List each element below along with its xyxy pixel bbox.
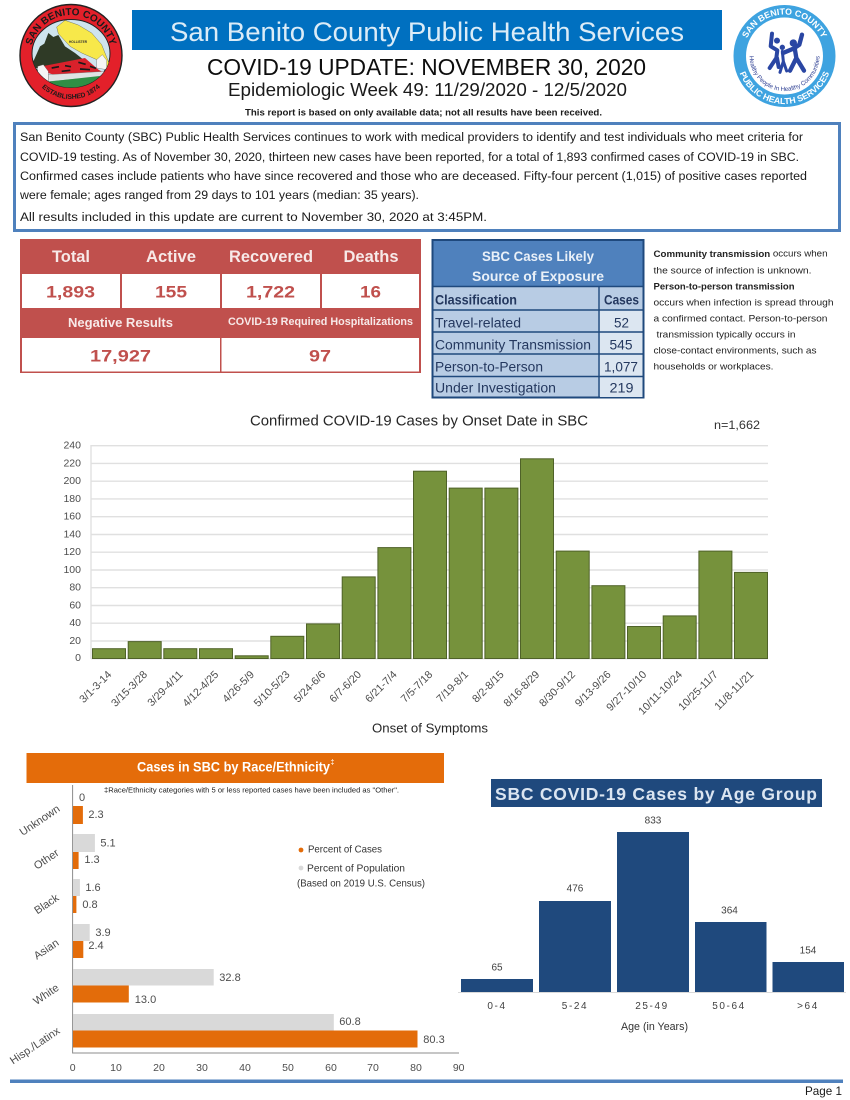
sample size: n=1,662: [714, 420, 760, 432]
title banner: San Benito County Public Health Services: [170, 17, 684, 47]
chart banner: [26, 753, 444, 783]
value labels: 65: [491, 962, 503, 974]
panel: source of exposure table: Under Investigation: [435, 380, 556, 396]
value labels: 2.4: [88, 940, 104, 952]
x axis labels: 0: [70, 1062, 76, 1074]
x axis labels: 7/19-8/1: [434, 669, 471, 705]
age labels: 5-24: [562, 1001, 588, 1012]
x axis labels: 10/25-11/7: [676, 669, 721, 713]
text block: transmission definitions: [654, 248, 834, 372]
x axis labels: 50: [282, 1062, 294, 1074]
logo: San Benito County seal: [19, 4, 123, 108]
logo ring text bottom: PUBLIC HEALTH SERVICES: [740, 71, 829, 104]
category labels: Unknown: [18, 803, 62, 839]
y axis labels: 220: [63, 457, 81, 469]
value labels: 3.9: [95, 927, 111, 939]
x axis labels: 4/12-4/25: [180, 669, 221, 710]
value labels: 80.3: [423, 1034, 445, 1046]
legend: [297, 844, 425, 890]
axes: [73, 785, 459, 1053]
y axis labels: 0: [75, 652, 81, 664]
x axis labels: 9/13-9/26: [573, 669, 614, 710]
panel: case totals table: 16: [360, 282, 381, 302]
panel: case totals table: 1,893: [46, 282, 95, 302]
x axis labels: 70: [367, 1062, 379, 1074]
y axis labels: 140: [63, 528, 81, 540]
text block: transmission definitions: Community transmission occurs when: [654, 248, 828, 258]
y axis labels: 120: [63, 546, 81, 558]
chart: confirmed cases by onset date: [63, 412, 768, 736]
x axis labels: 8/30-9/12: [537, 669, 578, 710]
chart: cases by age group: [458, 779, 846, 1033]
panel: source of exposure table: Classification: [435, 292, 517, 308]
category labels: [8, 803, 63, 1067]
x axis labels: 60: [325, 1062, 337, 1074]
x axis labels: 5/10-5/23: [252, 669, 293, 710]
panel: situation summary: COVID-19 testing. As of November 30, 2020, thirteen new cases have been reported, for a total of 1,893 confirmed cases of COVID-19 in SBC.: [20, 150, 799, 164]
panel: situation summary: All results included in this update are current to November 30, 2020 at 3:45PM.: [20, 210, 487, 224]
case bars: [73, 806, 418, 1048]
chart banner: SBC COVID-19 Cases by Age Group: [495, 784, 817, 804]
bars: [461, 832, 844, 992]
category labels: Other: [32, 847, 62, 872]
panel: case totals table: Total: [52, 248, 90, 266]
chart banner: [491, 779, 822, 807]
page number: Page 1: [805, 1084, 842, 1098]
value labels: 5.1: [100, 838, 116, 850]
text block: transmission definitions: occurs when infection is spread through: [654, 296, 834, 308]
y axis labels: [63, 440, 81, 664]
panel: case totals table: Recovered: [229, 248, 313, 266]
value labels: 833: [645, 816, 662, 826]
x axis title: Onset of Symptoms: [372, 720, 489, 736]
panel: case totals table: 1,722: [246, 282, 295, 302]
value labels: [491, 816, 817, 974]
age labels: 50-64: [712, 1001, 746, 1012]
text block: transmission definitions: Person-to-person transmission: [654, 280, 795, 292]
panel: case totals table: Negative Results: [68, 316, 173, 330]
title banner: [132, 10, 722, 50]
panel: case totals table: [20, 239, 421, 373]
x axis labels: 5/24-6/6: [292, 669, 328, 705]
chart: cases by race and ethnicity: [8, 753, 465, 1074]
value labels: 0.8: [82, 899, 98, 911]
panel: source of exposure table: Cases: [604, 292, 639, 308]
x axis labels: 9/27-10/10: [604, 669, 649, 714]
value labels: 0: [79, 792, 85, 804]
legend: Percent of Population: [307, 864, 405, 874]
panel: case totals table: Deaths: [344, 248, 398, 266]
category labels: Asian: [32, 937, 61, 962]
category labels: Black: [32, 892, 62, 917]
value labels: 13.0: [135, 994, 156, 1006]
panel: source of exposure table: 219: [610, 380, 634, 396]
logo: Public Health Services: [734, 5, 836, 107]
report disclaimer: This report is based on only available data; not all results have been received.: [245, 108, 602, 118]
value labels: 476: [567, 884, 584, 894]
chart banner: ‡: [330, 760, 334, 766]
logo: San Benito County seal: ESTABLISHED 1874: [42, 84, 100, 99]
x axis labels: [77, 669, 756, 717]
panel: situation summary: San Benito County (SBC) Public Health Services continues to work with medical providers to identify and test individuals who meet criteria for: [20, 130, 803, 144]
value labels: [79, 792, 445, 1046]
y axis labels: 200: [63, 475, 81, 487]
y axis labels: 80: [69, 582, 81, 594]
text block: transmission definitions: the source of infection is unknown.: [654, 264, 812, 276]
y axis labels: 180: [63, 493, 81, 505]
y axis labels: 60: [69, 599, 81, 611]
x axis labels: 3/15-3/28: [109, 669, 150, 710]
icon: three figures: [770, 34, 804, 72]
panel: case totals table: 97: [309, 346, 331, 366]
panel: case totals table: 17,927: [90, 346, 151, 366]
seal ring text: SAN BENITO COUNTY: [26, 8, 117, 44]
panel: source of exposure table: Travel-related: [435, 316, 521, 330]
x axis labels: 4/26-5/9: [220, 669, 257, 705]
panel: source of exposure table: SBC Cases Likely: [482, 248, 594, 264]
panel: case totals table: Active: [146, 248, 196, 266]
x axis labels: 10: [110, 1062, 122, 1074]
panel: source of exposure table: 1,077: [604, 360, 638, 374]
chart banner: Cases in SBC by Race/Ethnicity: [137, 760, 330, 774]
text block: transmission definitions: transmission typically occurs in: [656, 328, 796, 340]
panel: case totals table: 155: [155, 282, 187, 302]
value labels: 1.6: [85, 882, 101, 894]
x axis labels: 8/16-8/29: [501, 669, 542, 710]
y axis labels: 160: [63, 510, 81, 522]
x axis labels: 6/7-6/20: [327, 669, 364, 705]
panel: source of exposure table: [432, 240, 644, 398]
footnote: ‡Race/Ethnicity categories with 5 or less reported cases have been included as "Other".: [104, 786, 399, 794]
x axis labels: 30: [196, 1062, 208, 1074]
y axis labels: 240: [63, 440, 81, 452]
age labels: >64: [797, 1001, 819, 1012]
gridlines: [91, 445, 768, 659]
x axis labels: 80: [410, 1062, 422, 1074]
value labels: 2.3: [88, 809, 104, 821]
category labels: White: [31, 982, 61, 1008]
chart title: Confirmed COVID-19 Cases by Onset Date in SBC: [250, 412, 588, 430]
footer rule: [10, 1080, 843, 1083]
x axis labels: 11/8-11/21: [712, 669, 756, 713]
x axis labels: 7/5-7/18: [399, 669, 435, 705]
panel: situation summary: Confirmed cases include patients who have since recovered and those who are deceased. Fifty-four percent (1,015) of positive cases reported: [20, 169, 807, 183]
baseline: [458, 992, 846, 994]
panel: source of exposure table: Person-to-Person: [435, 360, 543, 374]
text block: transmission definitions: households or workplaces.: [654, 360, 774, 372]
x axis labels: 90: [453, 1062, 465, 1074]
y axis labels: 100: [63, 564, 81, 576]
y axis labels: 20: [69, 635, 81, 647]
value labels: 1.3: [84, 854, 100, 866]
text block: transmission definitions: a confirmed contact. Person-to-person: [654, 312, 828, 324]
x axis labels: 6/21-7/4: [363, 669, 400, 705]
x axis labels: 10/11-10/24: [636, 669, 685, 717]
bars: [92, 459, 768, 658]
value labels: 364: [721, 906, 738, 916]
population bars: [73, 834, 334, 1030]
x axis labels: 40: [239, 1062, 251, 1074]
age labels: 0-4: [487, 1001, 507, 1012]
heading: update date: COVID-19 UPDATE: NOVEMBER 30, 2020: [207, 54, 646, 80]
age labels: 25-49: [635, 1001, 669, 1012]
x axis labels: 3/29-4/11: [145, 669, 186, 709]
panel: source of exposure table: Source of Exposure: [472, 268, 604, 284]
panel: situation summary: [14, 124, 840, 230]
logo inner motto: Healthy People In Healthy Communities: [750, 56, 820, 92]
logo ring text top: SAN BENITO COUNTY: [742, 8, 828, 38]
y axis labels: 40: [69, 617, 81, 629]
text block: transmission definitions: close-contact environments, such as: [654, 344, 817, 356]
panel: source of exposure table: Community Transmission: [435, 338, 591, 352]
x axis labels: [70, 1062, 465, 1074]
x axis labels: 20: [153, 1062, 165, 1074]
panel: source of exposure table: 545: [610, 338, 632, 352]
panel: source of exposure table: 52: [614, 316, 629, 330]
logo: San Benito County seal: HOLLISTER: [69, 40, 88, 44]
value labels: 32.8: [219, 972, 241, 984]
age labels: [487, 1001, 819, 1012]
category labels: Hisp./Latinx: [8, 1025, 63, 1067]
value labels: 154: [800, 946, 817, 956]
panel: situation summary: were female; ages ranged from 29 days to 101 years (median: 35 years).: [19, 188, 419, 202]
value labels: 60.8: [339, 1016, 361, 1028]
x axis title: Age (in Years): [621, 1021, 688, 1033]
x axis labels: 8/2-8/15: [470, 669, 507, 705]
legend: Percent of Cases: [308, 844, 382, 856]
heading: epidemiologic week: Epidemiologic Week 49: 11/29/2020 - 12/5/2020: [228, 80, 627, 100]
legend: (Based on 2019 U.S. Census): [297, 878, 425, 890]
x axis labels: 3/1-3-14: [77, 669, 114, 706]
panel: case totals table: COVID-19 Required Hospitalizations: [228, 316, 413, 328]
